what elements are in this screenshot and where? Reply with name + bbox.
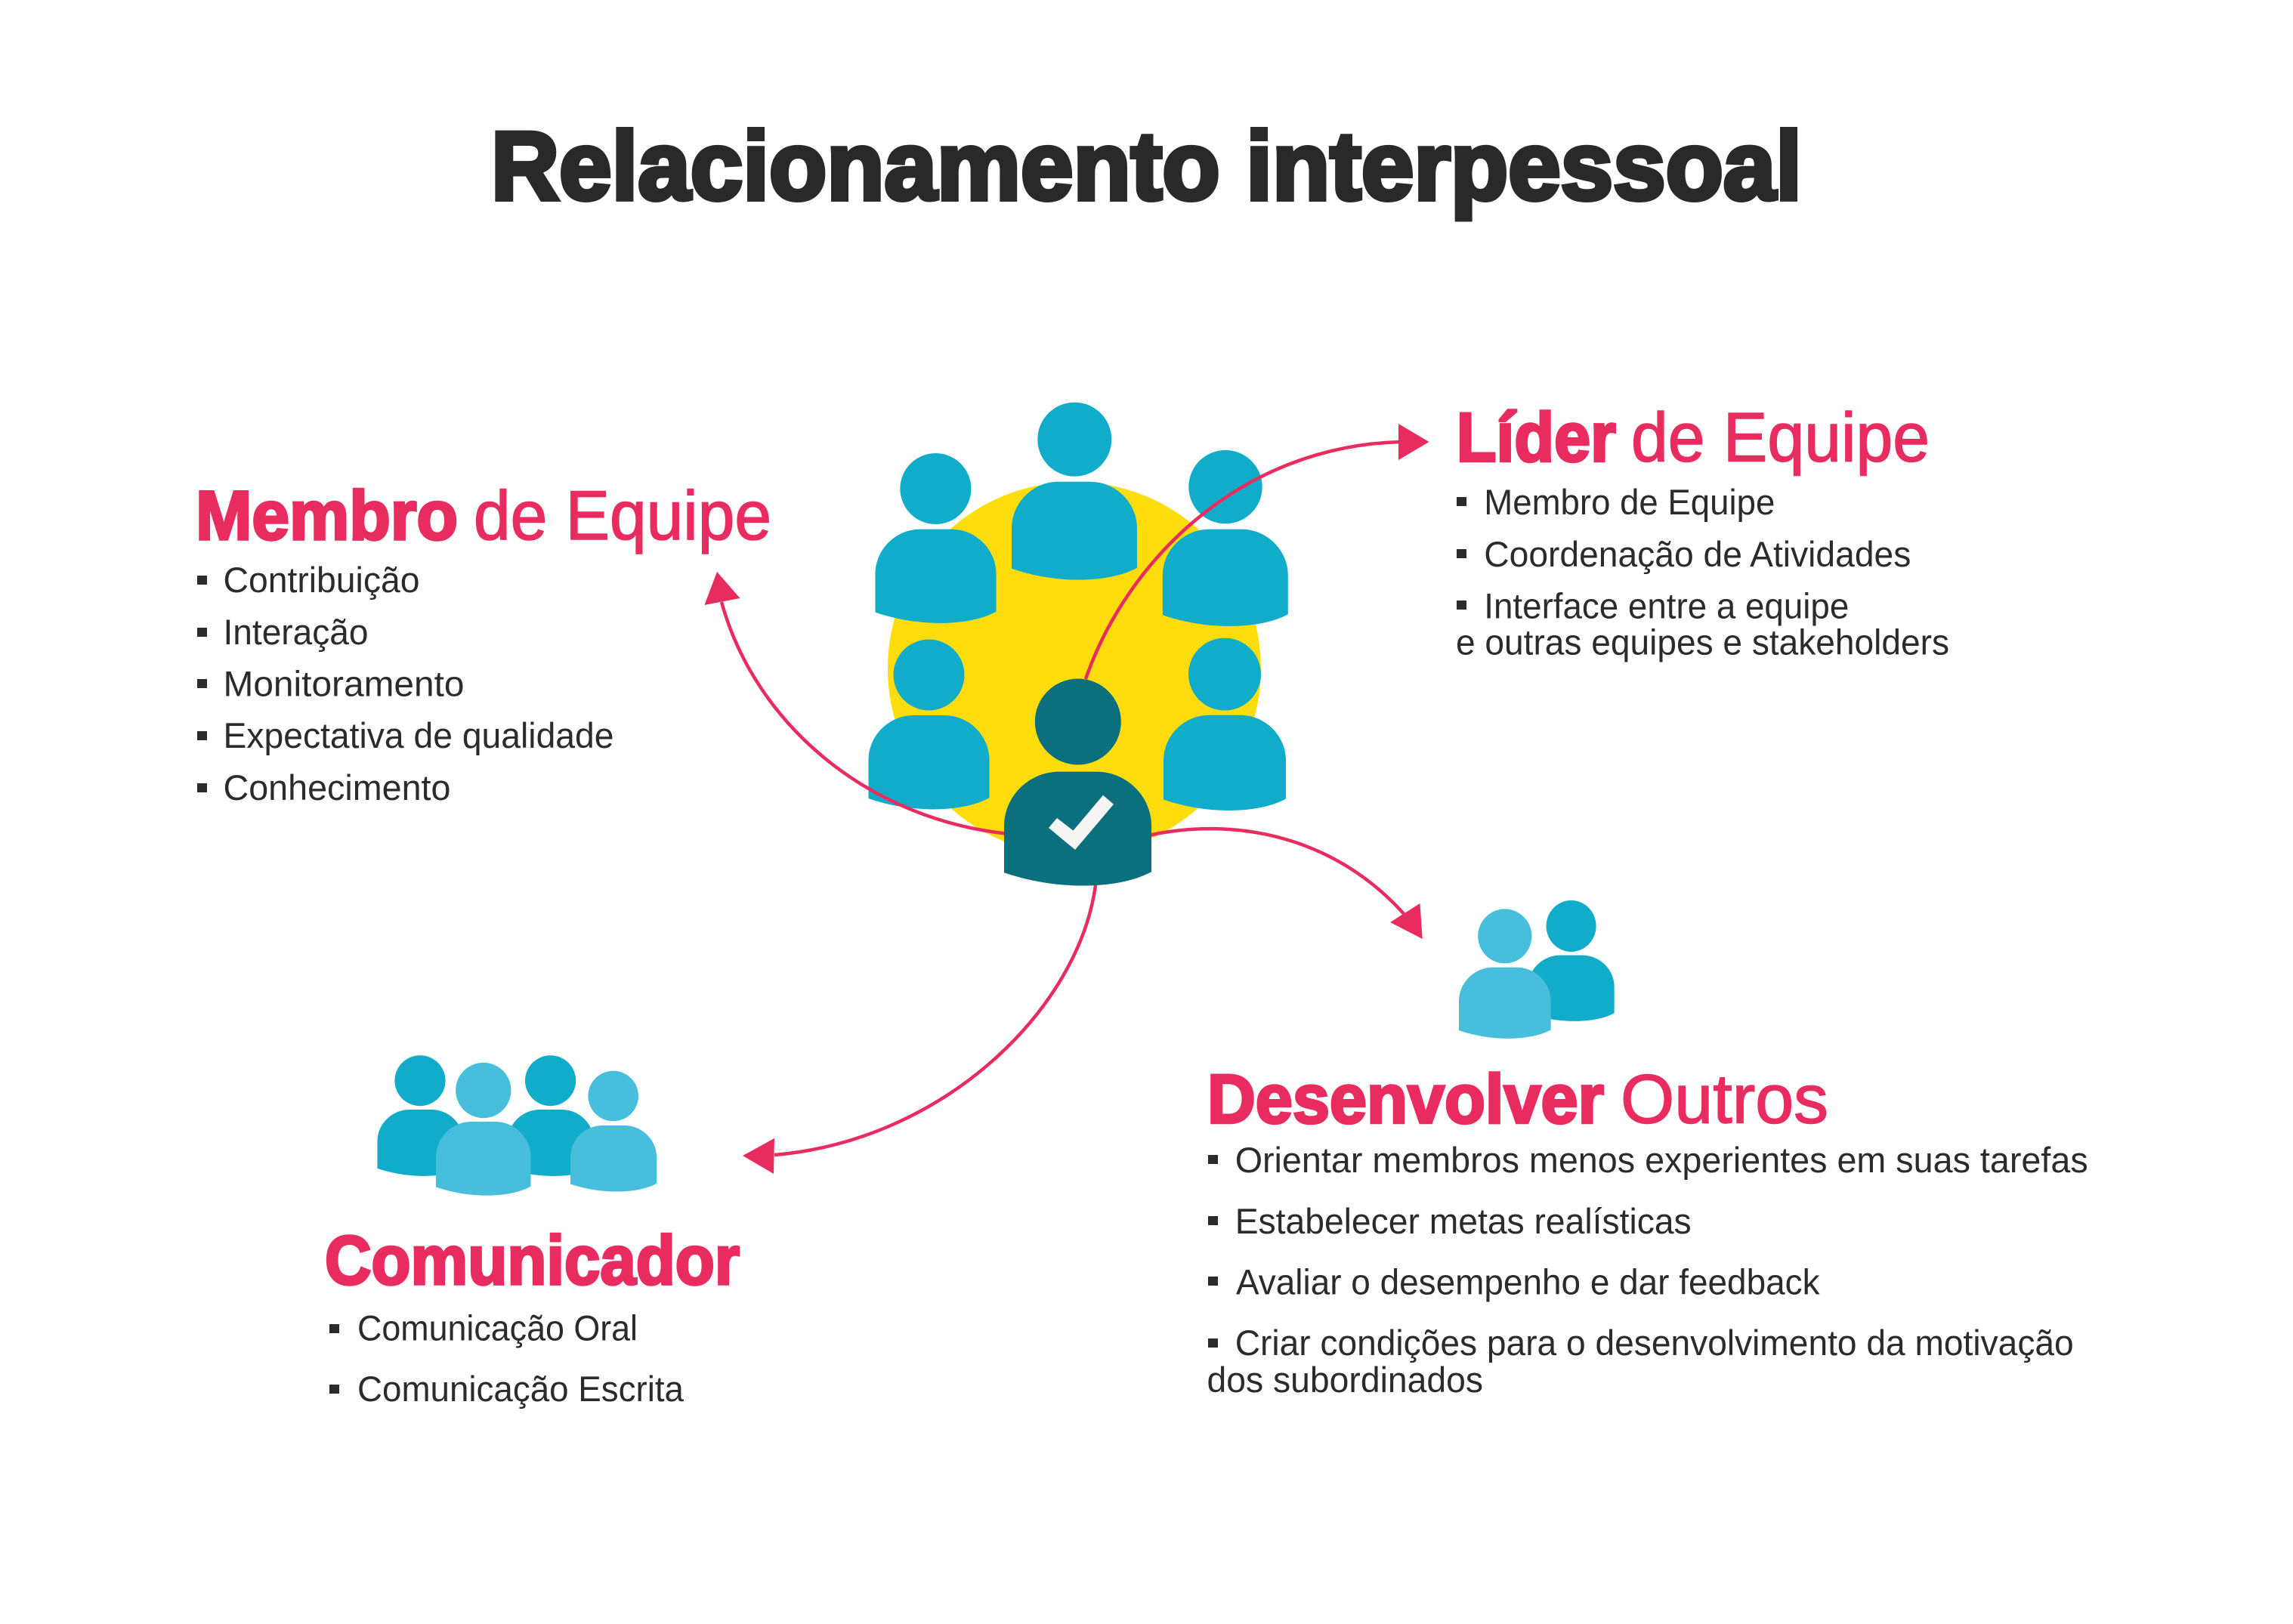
icon: group of four people (378, 1055, 657, 1196)
list: Líder de Equipe items: Coordenação de Atividades (1484, 534, 1911, 574)
arrow: to Desenvolver Outros (1148, 829, 1423, 939)
list: Desenvolver Outros items: Avaliar o desempenho e dar feedback (1236, 1261, 1820, 1301)
panel: Desenvolver Outros (1207, 900, 2088, 1400)
list: Membro de Equipe items: Monitoramento (224, 664, 464, 704)
icon: team leader with check mark (1004, 678, 1151, 886)
arrow: to Comunicador (743, 885, 1096, 1174)
list: Desenvolver Outros items: Orientar membros menos experientes em suas tarefas (1235, 1140, 2088, 1180)
list: Membro de Equipe items (197, 560, 613, 807)
icon: check mark (1049, 795, 1114, 850)
list: Líder de Equipe items: Membro de Equipe (1484, 482, 1775, 522)
icon: person top left (875, 453, 997, 623)
icon: person top right (1163, 450, 1288, 626)
arrow: to Líder de Equipe (1086, 424, 1429, 679)
heading: Membro de Equipe (196, 477, 771, 554)
heading: Líder de Equipe: de Equipe (1631, 400, 1930, 477)
list: Líder de Equipe items: e outras equipes e stakeholders (1456, 622, 1949, 662)
heading: Comunicador: Comunicador (325, 1222, 740, 1299)
icon: person middle right (1163, 638, 1286, 810)
heading: Líder de Equipe (1457, 400, 1930, 477)
list: Líder de Equipe items: Interface entre a equipe (1484, 585, 1849, 625)
panel: Membro de Equipe (196, 477, 771, 807)
heading: Desenvolver Outros: Desenvolver (1207, 1061, 1604, 1138)
panel: Comunicador (325, 1055, 740, 1409)
panel: Líder de Equipe (1456, 400, 1949, 662)
title: Relacionamento interpessoal (491, 113, 1802, 221)
heading: Líder de Equipe: Líder (1457, 400, 1616, 477)
icon: pair of people (1459, 900, 1615, 1039)
icon: team members around the leader (869, 403, 1288, 810)
heading: Desenvolver Outros (1207, 1061, 1828, 1138)
list: Desenvolver Outros items: Estabelecer metas realísticas (1235, 1201, 1692, 1241)
list: Membro de Equipe items: Conhecimento (224, 767, 450, 807)
list: Membro de Equipe items: Interação (224, 612, 369, 652)
list: Membro de Equipe items: Contribuição (224, 560, 420, 600)
list: Desenvolver Outros items (1207, 1140, 2088, 1400)
icon: person middle left (869, 639, 990, 809)
list: Desenvolver Outros items: Criar condições para o desenvolvimento da motivação (1235, 1323, 2074, 1363)
icon: person top (1012, 403, 1137, 580)
arrow: to Membro de Equipe (704, 572, 1009, 834)
heading: Membro de Equipe: de Equipe (474, 477, 771, 554)
list: Membro de Equipe items: Expectativa de qualidade (224, 715, 613, 755)
list: Líder de Equipe items (1456, 482, 1949, 662)
heading: Membro de Equipe: Membro (196, 477, 458, 554)
list: Comunicador items (329, 1308, 685, 1409)
list: Comunicador items: Comunicação Oral (357, 1308, 638, 1348)
list: Desenvolver Outros items: dos subordinados (1207, 1360, 1483, 1400)
central team illustration backdrop: yellow circle (888, 482, 1261, 855)
list: Comunicador items: Comunicação Escrita (357, 1369, 685, 1409)
heading: Desenvolver Outros: Outros (1621, 1061, 1828, 1138)
